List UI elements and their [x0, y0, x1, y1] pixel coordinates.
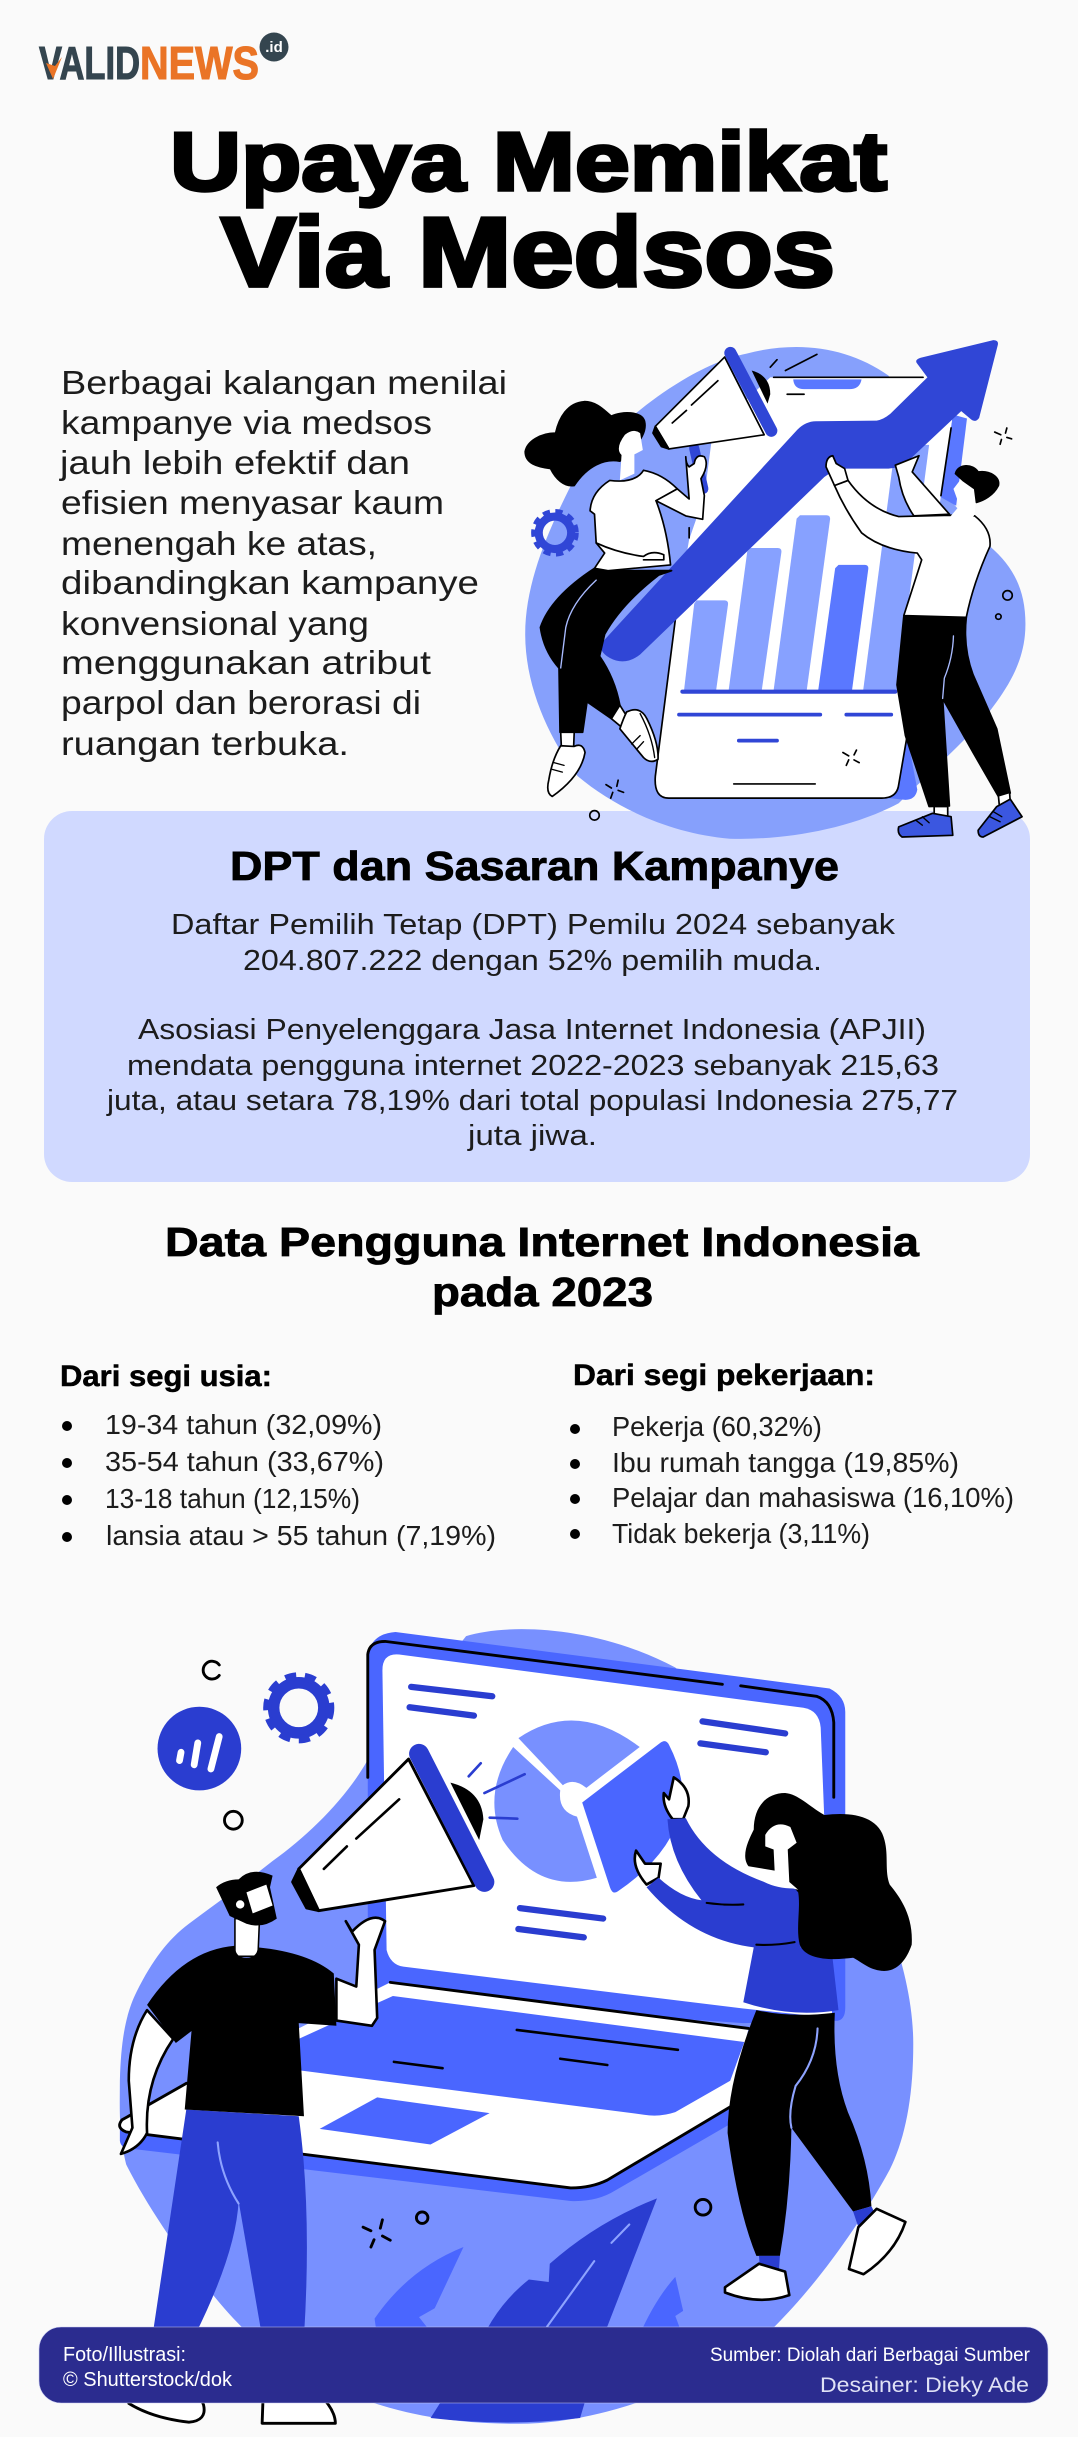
list: Dari segi usia: 13-18 tahun (12,15%) [105, 1483, 360, 1514]
list: Dari segi usia: Dari segi usia: [60, 1360, 272, 1393]
intro text block: menengah ke atas, [61, 525, 377, 562]
man shoes [898, 799, 1022, 837]
woman ankles [561, 705, 628, 749]
list: Dari segi pekerjaan [570, 1359, 1014, 1549]
woman head and neck [619, 431, 643, 480]
man hair [955, 466, 999, 502]
leaves [375, 2198, 683, 2422]
decorative circles and sparks [590, 428, 1012, 820]
list: Dari segi usia [60, 1360, 496, 1551]
woman shoes [725, 2209, 905, 2300]
list: Dari segi pekerjaan: Dari segi pekerjaan: [573, 1359, 875, 1392]
woman sweater [647, 1818, 838, 2013]
footer bar [39, 2327, 1048, 2403]
man ankles [934, 792, 1010, 817]
man right arm [336, 1918, 385, 2026]
man's shoes under footer [129, 2394, 335, 2423]
list: Dari segi pekerjaan: Pelajar dan mahasiswa (16,10%) [612, 1482, 1014, 1513]
title: Upaya Memikat [170, 115, 887, 208]
bar chart [684, 445, 929, 690]
intro text block: kampanye via medsos [61, 404, 432, 441]
card detail lines [655, 354, 951, 798]
woman hair [745, 1793, 912, 1971]
blue line on woman's pants [561, 580, 596, 668]
list: Dari segi pekerjaan: Tidak bekerja (3,11%) [612, 1518, 870, 1549]
growth arrow [601, 340, 998, 661]
section heading: Data Pengguna Internet Indonesia [165, 1219, 920, 1315]
woman hair [525, 402, 645, 486]
intro text block: dibandingkan kampanye [61, 564, 479, 601]
illustration: woman with megaphone, man lifting growth arrow [525, 340, 1025, 839]
panel paragraph: DPT: 204.807.222 dengan 52% pemilih muda. [243, 945, 822, 977]
laptop outline [368, 1641, 834, 1797]
megaphone handle [694, 448, 703, 489]
keyboard area [299, 1996, 744, 2116]
man head [949, 479, 976, 523]
intro text block: jauh lebih efektif dan [59, 444, 410, 481]
decorative circles and sparks [203, 1661, 711, 2247]
intro text block: konvensional yang [61, 605, 369, 642]
man hand [826, 456, 848, 485]
title: Via Medsos [221, 197, 835, 307]
chart card [655, 377, 952, 798]
icon: chart badge [158, 1707, 241, 1790]
footer source and designer: Sumber: Diolah dari Berbagai Sumber [710, 2345, 1031, 2366]
intro text block: Berbagai kalangan menilai [61, 364, 507, 401]
man pants [152, 2109, 307, 2337]
blob background [525, 347, 1025, 839]
footer credit [63, 2344, 233, 2391]
woman shirt and arm [590, 470, 677, 571]
footer source and designer [710, 2345, 1031, 2397]
man pants [897, 617, 1010, 807]
laptop screen inner [382, 1654, 832, 2018]
footer credit: Foto/Illustrasi: [63, 2344, 186, 2366]
footer credit: © Shutterstock/dok [63, 2369, 233, 2391]
man neck [235, 1919, 260, 1956]
list: Dari segi pekerjaan: Ibu rumah tangga (19,85%) [612, 1447, 959, 1478]
strip behind card [941, 414, 967, 506]
gear [267, 1676, 330, 1739]
intro text block [59, 364, 507, 762]
woman hands [635, 1777, 689, 1885]
intro text block: ruangan terbuka. [61, 725, 349, 762]
laptop base [120, 1982, 749, 2201]
woman pants [728, 2010, 871, 2256]
section heading: Data Pengguna Internet Indonesia: pada 2023 [432, 1269, 653, 1315]
intro text block: efisien menyasar kaum [61, 484, 444, 521]
man figure [121, 1872, 385, 2337]
man back arm [895, 456, 949, 516]
panel paragraph: DPT [171, 909, 896, 977]
man shirt and front arm [834, 480, 990, 617]
woman figure [525, 402, 706, 796]
section heading: Data Pengguna Internet Indonesia: Data Pengguna Internet Indonesia [165, 1219, 920, 1265]
panel heading: DPT dan Sasaran Kampanye [230, 843, 839, 889]
illustration: man with megaphone, woman at giant laptop [120, 1629, 913, 2424]
panel: DPT dan Sasaran Kampanye [44, 811, 1030, 1182]
list: Dari segi usia: lansia atau > 55 tahun (7,19%) [106, 1520, 496, 1551]
panel paragraph: APJII: Asosiasi Penyelenggara Jasa Internet Indonesia (APJII) [138, 1014, 926, 1046]
list: Dari segi usia: 35-54 tahun (33,67%) [105, 1446, 384, 1477]
gear [534, 512, 576, 554]
pie chart [494, 1721, 683, 1893]
panel paragraph: DPT: Daftar Pemilih Tetap (DPT) Pemilu 2024 sebanyak [171, 909, 896, 941]
megaphone [292, 1754, 525, 1911]
woman pants [540, 568, 672, 732]
intro text block: menggunakan atribut [61, 644, 431, 681]
panel paragraph: APJII: juta, atau setara 78,19% dari total populasi Indonesia 275,77 [106, 1085, 958, 1117]
man t-shirt [147, 1946, 336, 2116]
man head [216, 1872, 277, 1926]
panel paragraph: APJII: juta jiwa. [467, 1120, 597, 1152]
laptop screen [368, 1632, 845, 2023]
blob background [120, 1629, 913, 2424]
trackpad [320, 2097, 490, 2145]
list: Dari segi usia: 19-34 tahun (32,09%) [105, 1409, 382, 1440]
man left arm [121, 2010, 173, 2154]
screen text lines [410, 1687, 785, 1937]
woman ankles [759, 2206, 878, 2272]
megaphone [653, 353, 771, 449]
logo: Validnews.id [39, 32, 288, 89]
list: Dari segi pekerjaan: Pekerja (60,32%) [612, 1411, 822, 1442]
logo: Validnews.id: NEWS [140, 37, 259, 89]
panel paragraph: APJII: mendata pengguna internet 2022-2023 sebanyak 215,63 [127, 1050, 939, 1082]
woman figure [635, 1777, 912, 2300]
footer source and designer: Desainer: Dieky Ade [820, 2374, 1029, 2397]
woman shoes [548, 710, 658, 796]
panel paragraph: APJII [106, 1014, 958, 1152]
intro text block: parpol dan berorasi di [61, 684, 421, 721]
title [170, 115, 887, 307]
woman face [765, 1824, 798, 1890]
man figure [826, 456, 1022, 837]
logo: Validnews.id: .id [265, 39, 283, 56]
logo: Validnews.id: VALID [39, 37, 140, 89]
